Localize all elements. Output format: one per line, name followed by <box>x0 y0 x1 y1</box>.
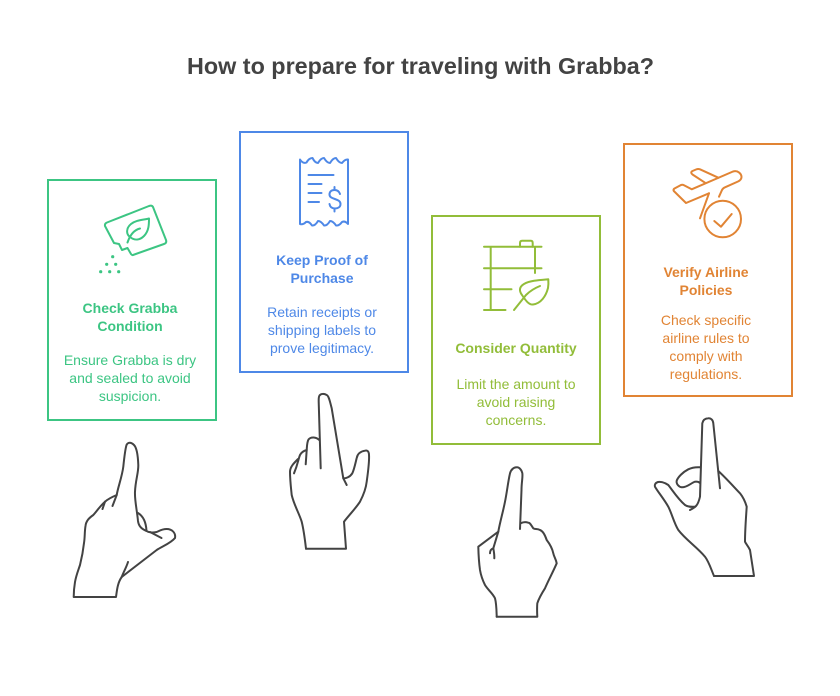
panel: verify airline policies <box>624 144 792 396</box>
icon: barrel with leaf <box>484 241 548 310</box>
card border orange <box>624 144 792 396</box>
card border olive <box>432 216 600 444</box>
panel: check grabba condition <box>48 180 216 420</box>
icon: airplane with check mark <box>674 169 742 237</box>
heading: check grabba condition: Check Grabba <box>83 300 178 316</box>
body text: airline rules to <box>662 330 750 346</box>
body text: regulations. <box>670 366 742 382</box>
hand 3 pointing up <box>478 467 557 617</box>
heading: verify airline policies: Verify Airline <box>663 264 749 280</box>
hand 4 pointing up <box>655 418 754 576</box>
body text: avoid raising <box>477 394 555 410</box>
icon: grabba packet with leaf <box>99 206 166 273</box>
body text: suspicion. <box>99 388 161 404</box>
title: How to prepare for traveling with Grabba? <box>187 53 654 79</box>
heading: keep proof of purchase: Keep Proof of <box>276 252 368 268</box>
heading: verify airline policies: Policies <box>680 282 733 298</box>
body text: and sealed to avoid <box>69 370 191 386</box>
heading: consider quantity: Consider Quantity <box>455 340 577 356</box>
card border green <box>48 180 216 420</box>
body text: comply with <box>669 348 743 364</box>
heading: keep proof of purchase: Purchase <box>290 270 354 286</box>
body text: Ensure Grabba is dry <box>64 352 196 368</box>
body text: Retain receipts or <box>267 304 377 320</box>
body text: prove legitimacy. <box>270 340 374 356</box>
icon: receipt with dollar sign <box>300 158 348 226</box>
heading: check grabba condition: Condition <box>97 318 163 334</box>
body text: Check specific <box>661 312 751 328</box>
hand 1 pointing up <box>74 443 175 597</box>
body text: Limit the amount to <box>456 376 576 392</box>
body text: concerns. <box>486 412 546 428</box>
panel: consider quantity <box>432 216 600 444</box>
body text: shipping labels to <box>268 322 376 338</box>
panel: keep proof of purchase <box>240 132 408 372</box>
card border blue <box>240 132 408 372</box>
hand 2 pointing up <box>290 394 369 549</box>
